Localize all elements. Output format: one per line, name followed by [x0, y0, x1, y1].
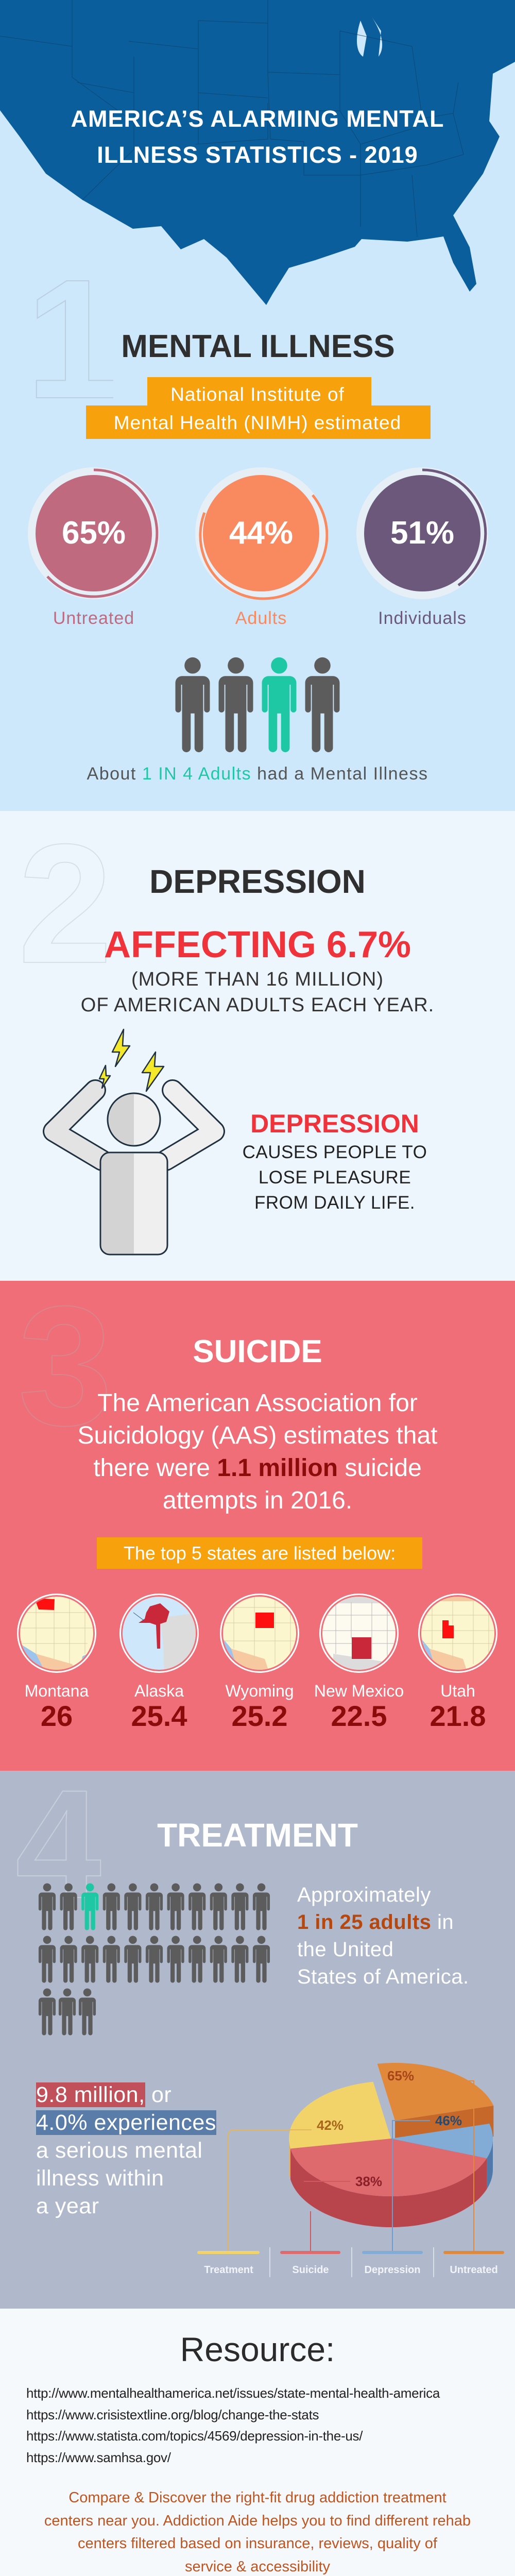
text: depression causes: LOSE PLEASURE	[259, 1167, 411, 1188]
state: Wyoming: Wyoming	[225, 1682, 294, 1700]
section 4 background	[0, 1771, 515, 2309]
state: Wyoming	[220, 1594, 299, 1732]
text: 9.8 million: 9.8 million, or	[36, 2082, 171, 2107]
stat circle: 44% adults: Adults	[235, 608, 287, 628]
pie chart with legend: 38%	[355, 2174, 382, 2189]
pie chart with legend: Treatment	[204, 2264, 253, 2276]
pie chart with legend: Untreated	[450, 2264, 498, 2276]
stat circle: 44% adults	[195, 467, 328, 628]
callout: NIMH	[86, 377, 431, 439]
icon: stressed person	[43, 1028, 225, 1255]
stat circle: 51% individuals	[356, 467, 488, 628]
heading: resource: Resource:	[180, 2330, 335, 2368]
state: Alaska: 25.4	[131, 1700, 187, 1732]
text: AAS estimate: The American Association for	[97, 1389, 418, 1417]
text: depression causes: FROM DAILY LIFE.	[254, 1193, 415, 1213]
state: New Mexico: New Mexico	[314, 1682, 404, 1700]
text: 9.8 million: 4.0% experiences	[36, 2110, 216, 2135]
map: USA	[0, 0, 515, 305]
callout: top 5 states: The top 5 states are listed below:	[124, 1543, 396, 1564]
pie chart with legend	[197, 2063, 504, 2277]
title: AMERICA’S ALARMING MENTAL	[71, 106, 444, 132]
state: Alaska	[119, 1594, 199, 1732]
text: AAS estimate	[77, 1389, 438, 1514]
text: depression causes	[243, 1109, 427, 1213]
text: AAS estimate: attempts in 2016.	[163, 1487, 352, 1514]
section 2 background	[0, 811, 515, 1281]
resource links: https://www.statista.com/topics/4569/depression-in-the-us/	[26, 2428, 363, 2444]
state: New Mexico: 22.5	[331, 1700, 387, 1732]
state: Utah: Utah	[440, 1682, 475, 1700]
text: AAS estimate: Suicidology (AAS) estimates that	[77, 1422, 437, 1449]
resource links: https://www.samhsa.gov/	[26, 2449, 171, 2465]
stat circle: 65% untreated	[28, 467, 160, 628]
caption: 1 in 4 adults: About 1 IN 4 Adults had a Mental Illness	[87, 764, 428, 784]
promo text: Compare & Discover the right-fit drug addiction treatment	[68, 2489, 447, 2506]
promo text	[44, 2489, 471, 2575]
text: 1 in 25 adults: 1 in 25 adults in	[297, 1911, 454, 1934]
title	[71, 106, 444, 168]
state: Montana: Montana	[25, 1682, 89, 1700]
stat: affecting 6.7%: AFFECTING 6.7%	[104, 924, 411, 965]
text: depression causes: CAUSES PEOPLE TO	[243, 1142, 427, 1162]
heading: treatment: TREATMENT	[157, 1817, 358, 1854]
stat circle: 65% untreated: Untreated	[53, 608, 134, 628]
resource links: http://www.mentalhealthamerica.net/issues/state-mental-health-america	[26, 2385, 440, 2401]
stat: affecting 6.7%: (MORE THAN 16 MILLION)	[131, 969, 384, 990]
text: 9.8 million: illness within	[36, 2166, 164, 2191]
heading: depression: DEPRESSION	[149, 863, 366, 900]
text: 1 in 25 adults: Approximately	[297, 1884, 431, 1906]
state: New Mexico	[314, 1594, 404, 1732]
section 3 background	[0, 1281, 515, 1771]
text: AAS estimate: there were 1.1 million suicide	[93, 1454, 422, 1482]
icon: 4 people, one highlighted	[175, 657, 340, 752]
heading: suicide: SUICIDE	[193, 1334, 322, 1369]
text: 9.8 million	[36, 2082, 216, 2218]
pie chart with legend: 46%	[435, 2113, 462, 2128]
resource links: https://www.crisistextline.org/blog/change-the-stats	[26, 2407, 319, 2422]
pie chart with legend: Suicide	[292, 2264, 329, 2276]
icon: 25 people grid	[38, 1884, 270, 2035]
pie chart with legend: 65%	[387, 2068, 414, 2083]
resource links	[26, 2385, 440, 2465]
state: Utah: 21.8	[430, 1700, 486, 1732]
state: Alaska: Alaska	[134, 1682, 184, 1700]
text: 1 in 25 adults: States of America.	[297, 1965, 469, 1988]
text: 1 in 25 adults: the United	[297, 1938, 393, 1961]
state: Utah	[418, 1594, 497, 1732]
text: depression causes: DEPRESSION	[250, 1109, 419, 1138]
section 1 background	[0, 0, 515, 811]
state: Montana: 26	[41, 1700, 73, 1732]
text: 9.8 million: a year	[36, 2194, 99, 2218]
stat circle: 51% individuals: Individuals	[378, 608, 467, 628]
state: Montana	[17, 1594, 96, 1732]
stat circle: 44% adults: 44%	[229, 515, 293, 551]
promo text: centers near you. Addiction Aide helps you to find different rehab	[44, 2513, 471, 2529]
promo text: centers filtered based on insurance, reviews, quality of	[78, 2535, 437, 2552]
text: 9.8 million: a serious mental	[36, 2138, 203, 2163]
section 5 background	[0, 2309, 515, 2576]
pie chart with legend: Depression	[365, 2264, 420, 2276]
stat circle: 65% untreated: 65%	[62, 515, 126, 551]
stat: affecting 6.7%: OF AMERICAN ADULTS EACH YEAR.	[81, 994, 434, 1016]
pie chart with legend: 42%	[317, 2117, 344, 2133]
callout: top 5 states	[97, 1537, 422, 1569]
callout: NIMH: Mental Health (NIMH) estimated	[114, 412, 401, 433]
stat: affecting 6.7%	[81, 924, 434, 1016]
title: ILLNESS STATISTICS - 2019	[97, 142, 418, 168]
state: Wyoming: 25.2	[232, 1700, 287, 1732]
callout: NIMH: National Institute of	[170, 384, 345, 405]
stat circle: 51% individuals: 51%	[390, 515, 454, 551]
heading: mental illness: MENTAL ILLNESS	[121, 329, 395, 364]
text: 1 in 25 adults	[297, 1884, 469, 1988]
promo text: service & accessibility	[185, 2558, 330, 2575]
